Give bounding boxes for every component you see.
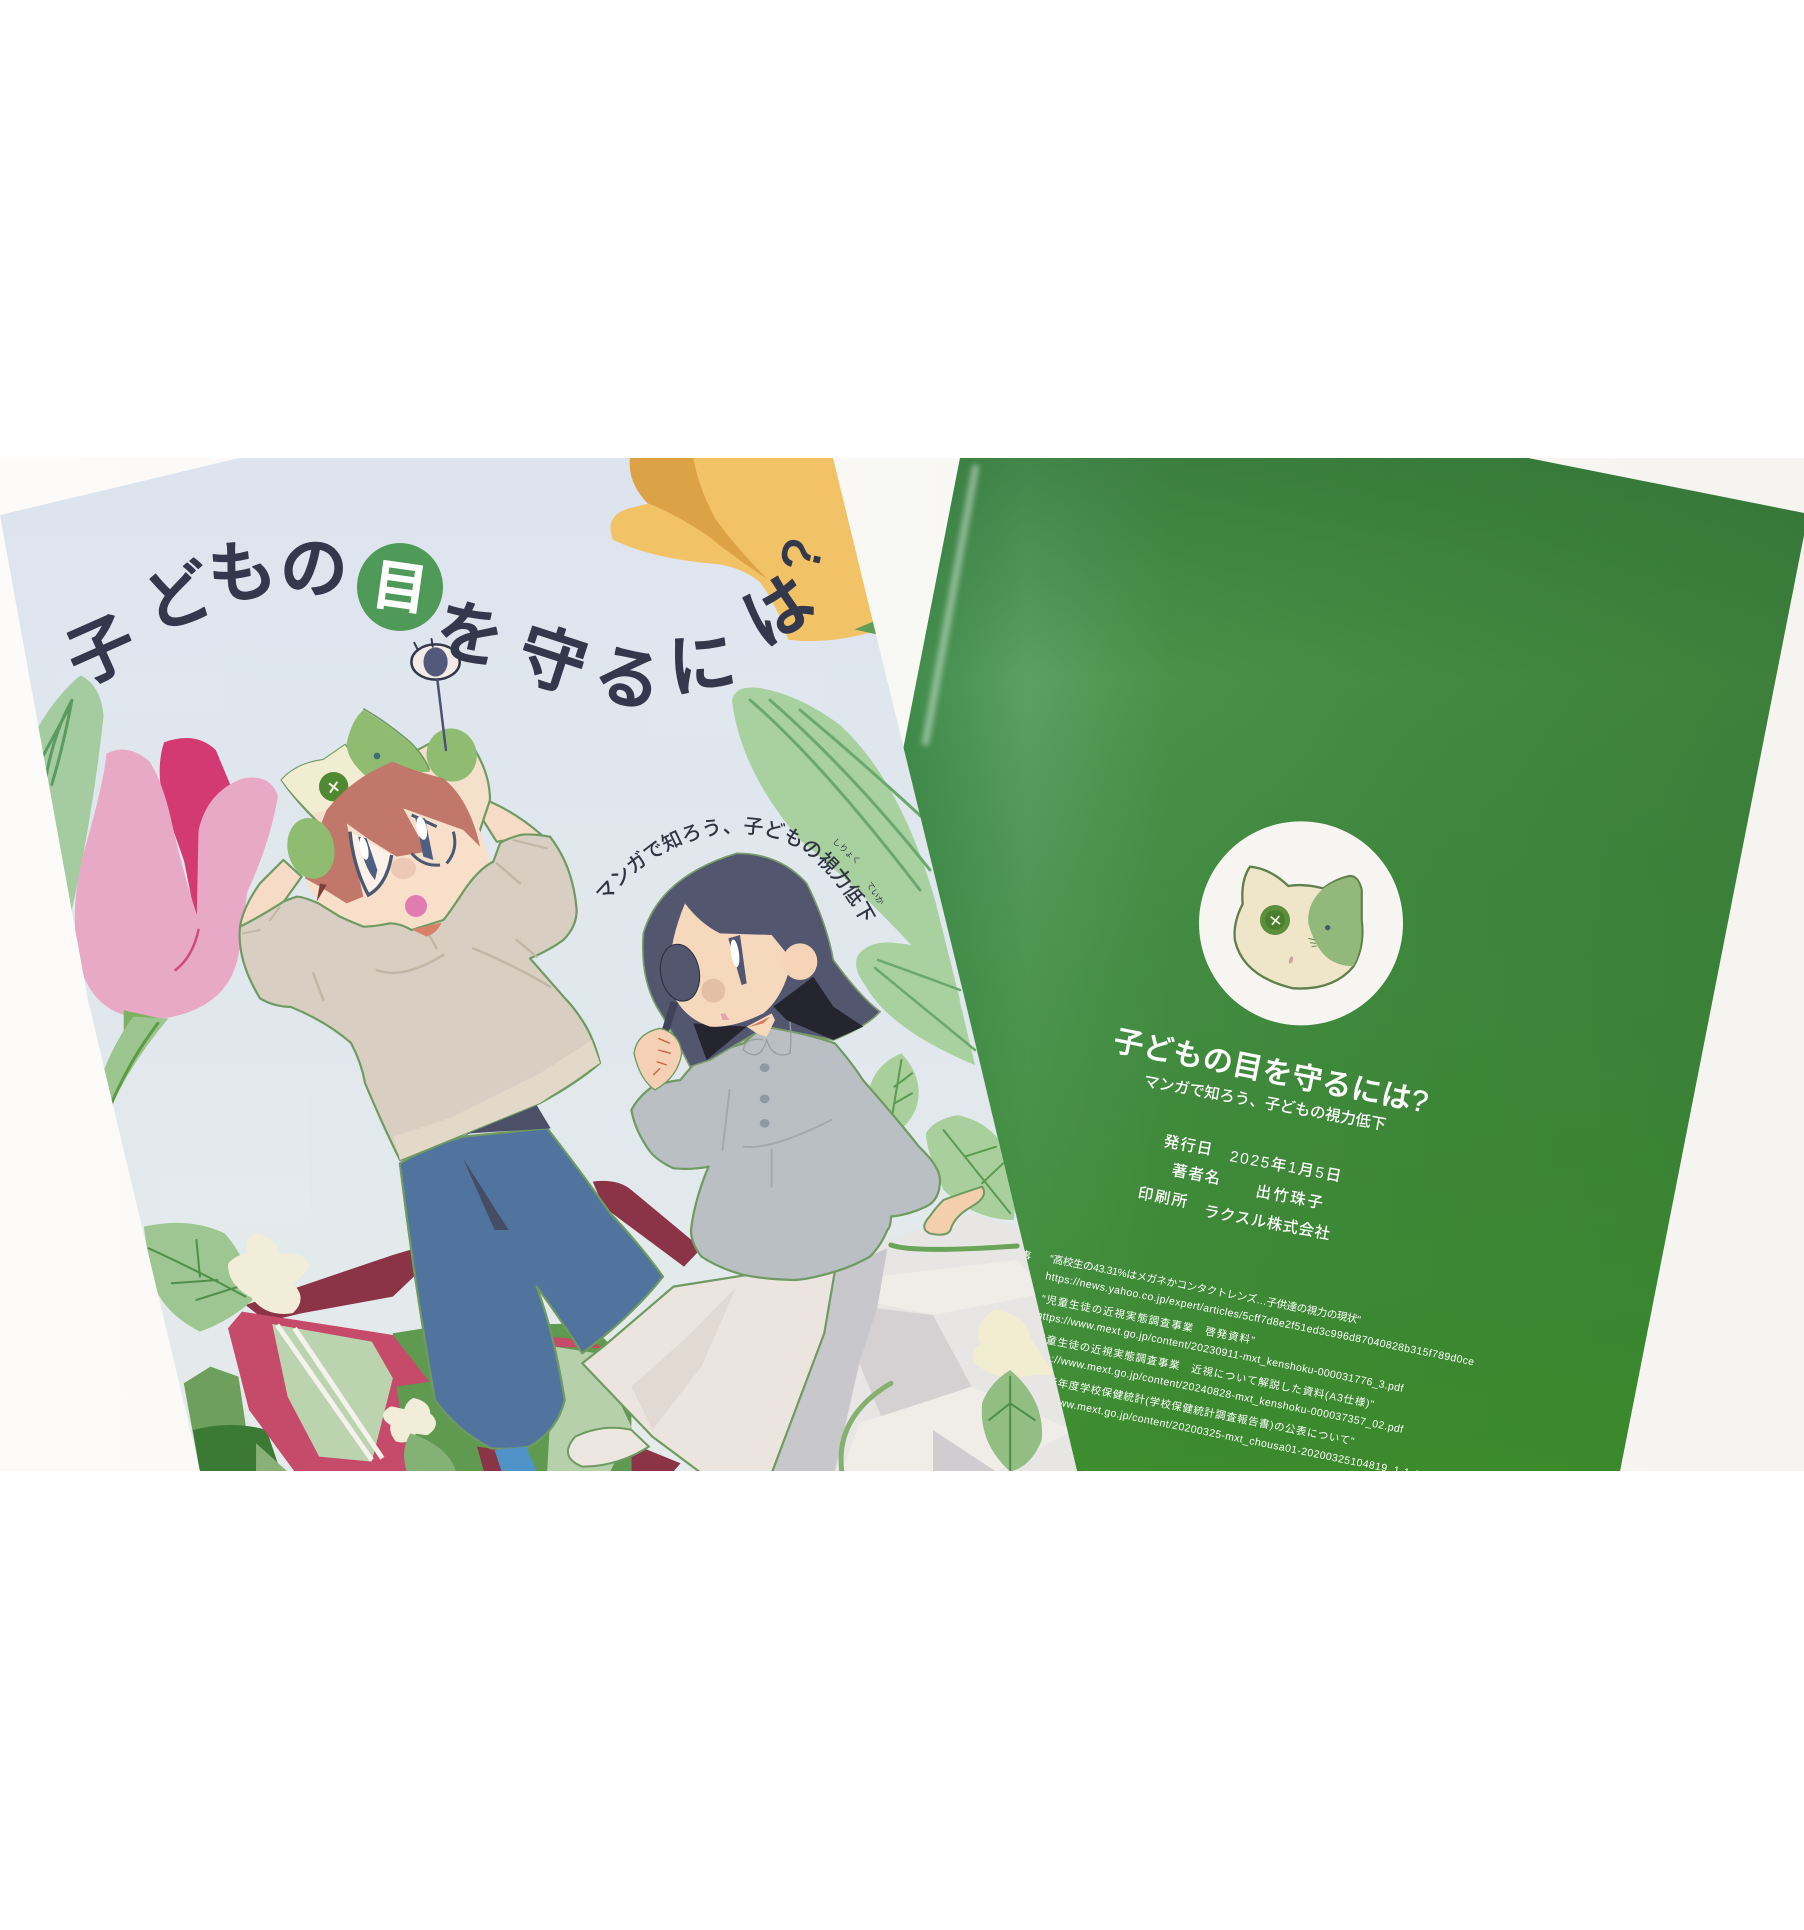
title: 子	[55, 602, 148, 699]
figure: girl	[568, 853, 984, 1473]
figure: boy	[240, 709, 663, 1472]
icon: green eye kanji badge: 目	[368, 552, 432, 623]
subtitle on arc: しりょく	[831, 836, 863, 866]
title: 守	[508, 614, 596, 708]
title: は	[730, 561, 828, 661]
title: に	[663, 623, 741, 707]
girl skirt, shoe and foot	[568, 1187, 984, 1473]
icon: orange tulip	[610, 458, 880, 641]
subtitle on arc: マンガで知ろう、子どもの視力低下	[596, 817, 876, 920]
references list: "児童生徒の近視実態調査事業 啓発資料"	[1040, 1292, 1256, 1347]
references list: 事	[1019, 1248, 1033, 1263]
references list: https://www.mext.go.jp/content/20230911-mxt_kenshoku-000031776_3.pdf	[1035, 1309, 1404, 1395]
colophon	[1136, 1132, 1343, 1243]
references list: https://www.mext.go.jp/content/20200325-mxt_chousa01-20200325104819_1-1-1.pdf	[1015, 1388, 1439, 1485]
girl head, hair and magnifier	[634, 853, 880, 1090]
colophon: 発行日	[1162, 1132, 1214, 1159]
icon: green eye kanji badge	[357, 543, 443, 631]
boy head, arms and cat hood	[240, 709, 600, 1160]
title: の	[279, 530, 349, 608]
title	[66, 540, 821, 707]
boy trousers	[400, 1093, 663, 1472]
girl blouse	[631, 1027, 940, 1280]
title: ど	[134, 551, 222, 645]
boy sweater	[240, 834, 600, 1160]
icon: red glasses	[228, 1181, 702, 1472]
icon: tulip stem	[104, 1017, 168, 1107]
title: も	[203, 531, 281, 615]
back cover subtitle: マンガで知ろう、子どもの視力低下	[1142, 1072, 1388, 1134]
panel: back cover	[900, 458, 1804, 1485]
scene: stone block and vine	[774, 1230, 1077, 1471]
scene: ground foliage	[184, 1323, 631, 1472]
icon: left leaf and pink tulip	[38, 676, 278, 1031]
icon: eye on a stick	[411, 639, 460, 750]
colophon: 印刷所	[1136, 1184, 1189, 1211]
icon: small leaves beside girl	[870, 1053, 1015, 1220]
references list: "令和元年度学校保健統計(学校保健統計調査報告書)の公表について"	[1019, 1369, 1356, 1448]
references list: https://news.yahoo.co.jp/expert/articles/5cff7d8e2f51ed3c996d87040828b315f789d0ce	[1044, 1270, 1475, 1368]
references list	[1015, 1248, 1475, 1485]
colophon: ラクスル株式会社	[1202, 1202, 1332, 1243]
icon: right big leaves	[732, 688, 975, 1065]
badge: cat face in white circle	[1199, 821, 1403, 1025]
references list: https://www.mext.go.jp/content/20240828-mxt_kenshoku-000037357_02.pdf	[1025, 1348, 1404, 1436]
title: ?	[769, 534, 834, 576]
colophon: 2025年1月5日	[1228, 1147, 1343, 1186]
photo backdrop	[0, 458, 1804, 1471]
subtitle on arc: ていか	[864, 880, 887, 907]
title: る	[586, 634, 670, 724]
back cover title: 子どもの目を守るには?	[1111, 1025, 1431, 1120]
references list: "児童生徒の近視実態調査事業 近視について解説した資料(A3仕様)"	[1029, 1330, 1376, 1411]
colophon: 著者名	[1170, 1161, 1222, 1188]
colophon: 出竹珠子	[1254, 1182, 1324, 1212]
title: を	[429, 591, 511, 679]
panel: front cover	[0, 458, 1077, 1471]
background faint shapes	[60, 560, 820, 1240]
icon: lower left leaf and flowers	[144, 1223, 1049, 1472]
references list: "高校生の43.31%はメガネかコンタクトレンズ…子供達の視力の現状"	[1048, 1252, 1362, 1327]
